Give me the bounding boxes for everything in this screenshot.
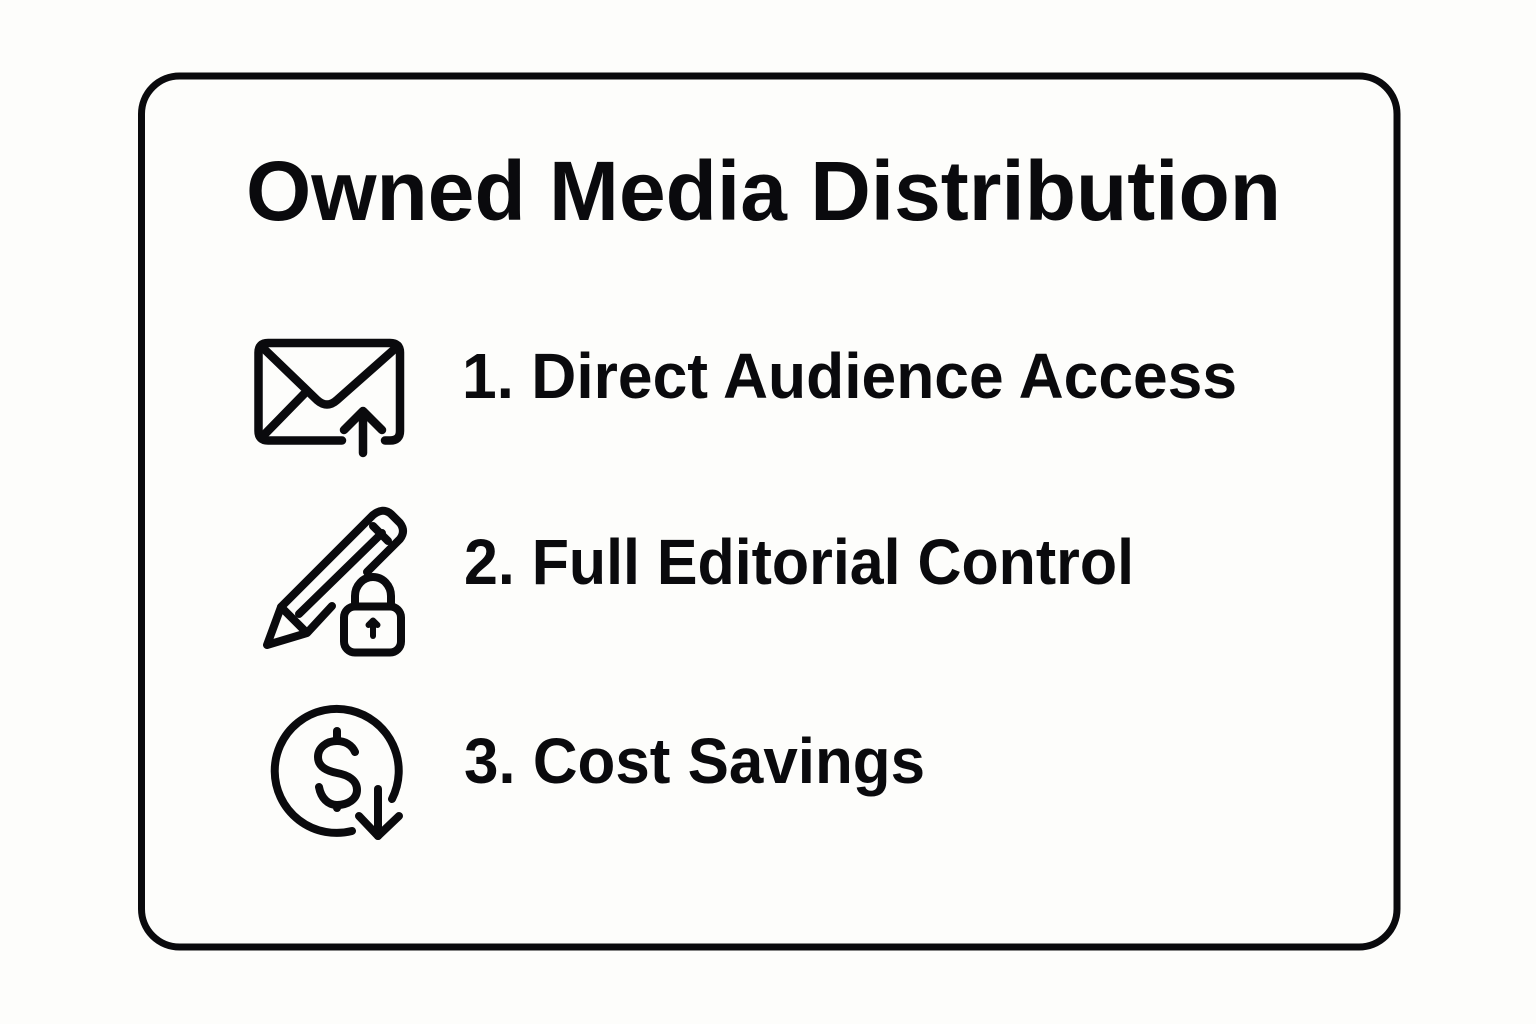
text: item 3: 3. Cost Savings [464,725,925,797]
icon: envelope with up arrow [258,343,400,453]
text: item 1: 1. Direct Audience Access [462,340,1237,412]
title: Owned Media Distribution [246,144,1281,238]
icon: pencil with padlock [267,511,403,652]
text: item 2: 2. Full Editorial Control [464,526,1134,598]
icon: dollar with down arrow [275,709,399,836]
panel: owned media card [142,76,1397,947]
